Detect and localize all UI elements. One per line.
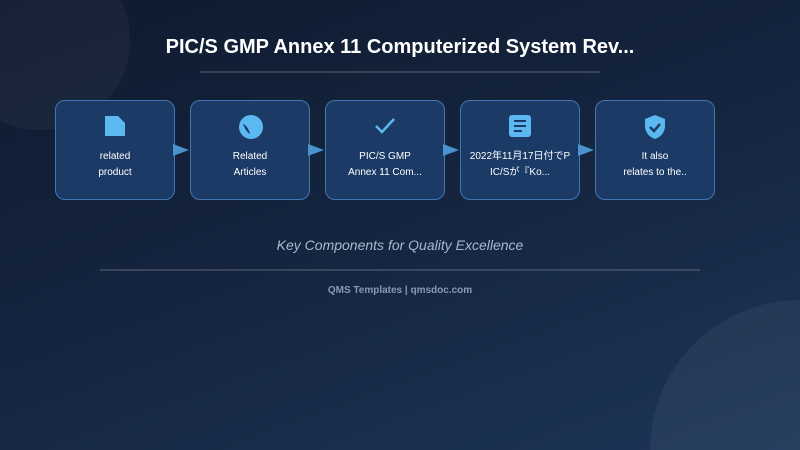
step 2: Articles — [234, 167, 266, 178]
step 3: PIC/S GMP — [359, 151, 411, 162]
step 2 — [190, 100, 310, 200]
subtitle: Key Components for Quality Excellence — [277, 237, 523, 253]
arrow 3 — [443, 144, 459, 156]
icon: shield — [645, 115, 665, 139]
step 4: 2022年11月17日付でP — [470, 151, 570, 162]
step 5: It also — [642, 151, 668, 162]
arrow 2 — [308, 144, 324, 156]
step 1 — [55, 100, 175, 200]
arrow 1 — [173, 144, 189, 156]
step 3: Annex 11 Com... — [348, 167, 422, 178]
arrow 4 — [578, 144, 594, 156]
footer: QMS Templates | qmsdoc.com — [328, 285, 472, 296]
step 2: Related — [233, 151, 267, 162]
step 5 — [595, 100, 715, 200]
step 4: IC/Sが『Ko... — [490, 167, 550, 178]
step 3 — [325, 100, 445, 200]
icon: document — [105, 116, 125, 136]
step 5: relates to the.. — [623, 167, 687, 178]
step 1: related — [100, 151, 130, 162]
icon: check — [375, 118, 395, 134]
step 1: product — [98, 167, 132, 178]
title: PIC/S GMP Annex 11 Computerized System Rev... — [166, 36, 634, 58]
icon: note — [509, 115, 531, 137]
icon: globe — [239, 115, 263, 139]
step 4 — [460, 100, 580, 200]
